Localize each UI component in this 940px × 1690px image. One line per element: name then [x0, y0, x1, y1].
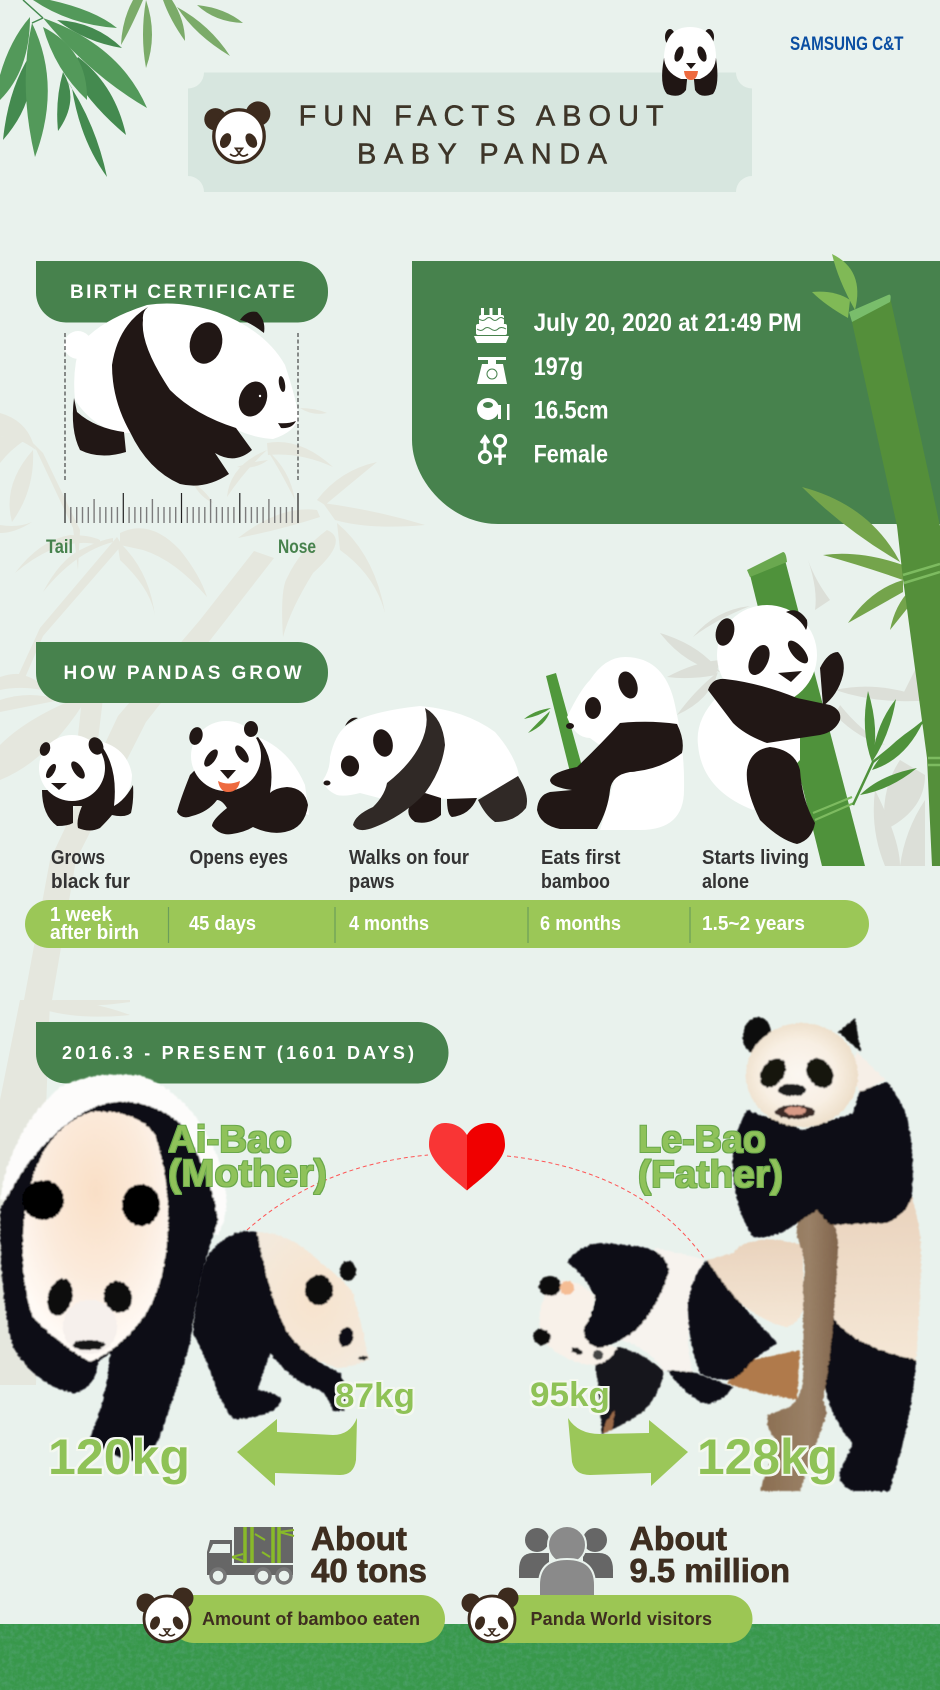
timeline bar: 1 week: [50, 904, 113, 926]
weight labels: [48, 1376, 838, 1485]
birth panda with ruler: [64, 304, 299, 523]
weight labels: 128kg: [697, 1429, 838, 1485]
icon: tape measure: [477, 398, 510, 420]
icon: heart: [429, 1123, 505, 1190]
ruler labels: Tail: [46, 537, 73, 558]
growth stage labels: alone: [702, 871, 749, 893]
stat: visitors: [630, 1520, 790, 1589]
ghost bamboo background: [0, 408, 425, 1385]
stat: bamboo eaten: 40 tons: [311, 1552, 427, 1589]
back leg: [73, 398, 126, 456]
timeline bar: 45 days: [189, 913, 256, 935]
photo: father panda Le-Bao climbing: [688, 1015, 921, 1491]
weight labels: 120kg: [48, 1429, 190, 1485]
icon: panda face in title: [204, 101, 270, 162]
ghost leaves behind right pandas: [660, 560, 930, 866]
title: FUN FACTS ABOUT: [299, 100, 664, 132]
birth facts: July 20, 2020 at 21:49 PM: [534, 309, 802, 337]
parent name labels: (Father): [638, 1154, 783, 1196]
birth facts: [534, 309, 802, 468]
growth stage labels: bamboo: [541, 871, 610, 893]
logo: SAMSUNG C&T: [790, 34, 904, 55]
arrow: mother weight: [237, 1418, 357, 1486]
timeline bar: 1.5~2 years: [702, 913, 805, 935]
photo: mother panda Ai-Bao side: [193, 1231, 370, 1419]
growth stage labels: Grows: [51, 847, 105, 869]
icon: panda face on bamboo pill: [136, 1588, 194, 1642]
icon: panda face on visitors pill: [462, 1588, 518, 1642]
growth stage labels: Opens eyes: [190, 847, 288, 869]
timeline bar: 4 months: [349, 913, 429, 935]
panda stage 2: [177, 721, 309, 834]
photo: father panda second body: [530, 1243, 733, 1434]
tail: [64, 331, 92, 359]
parent name labels: (Mother): [168, 1153, 327, 1195]
heading: 2016.3 to present: 2016.3 - PRESENT (1601 DAYS): [62, 1043, 414, 1063]
grass: [0, 1624, 940, 1690]
pill: bamboo eaten: [170, 1595, 445, 1643]
growth stage labels: Eats first: [541, 847, 621, 869]
growth stage labels: paws: [349, 871, 394, 893]
top-left bamboo leaves: [0, 0, 243, 177]
pill: bamboo eaten: Amount of bamboo eaten: [202, 1609, 420, 1629]
second bamboo stalk with branch: [747, 552, 923, 866]
icon: standing panda on banner: [662, 27, 717, 96]
right bamboo: middle leaves: [802, 487, 910, 630]
pill: visitors: [480, 1595, 752, 1643]
growth stage labels: black fur: [51, 871, 130, 893]
photo: mother panda Ai-Bao front: [0, 1074, 226, 1462]
title: [299, 100, 664, 170]
panda stage 3: [323, 706, 527, 830]
arrow: father weight: [568, 1418, 688, 1486]
heading: how pandas grow: [36, 642, 328, 703]
stat: visitors: About: [630, 1520, 727, 1557]
growth stage labels: Walks on four: [349, 847, 469, 869]
title: BABY PANDA: [357, 138, 608, 170]
ruler labels: [46, 537, 316, 558]
stat: visitors: 9.5 million: [630, 1552, 790, 1589]
weight labels: 95kg: [530, 1376, 610, 1414]
stat: bamboo eaten: [311, 1520, 427, 1589]
timeline bar: 6 months: [540, 913, 621, 935]
icon: truck with bamboo: [207, 1527, 294, 1583]
ruler labels: Nose: [278, 537, 316, 558]
timeline bar: [25, 900, 869, 948]
birth facts: 16.5cm: [534, 396, 609, 424]
icon: gender symbols: [480, 436, 506, 465]
timeline bar: after birth: [50, 922, 139, 944]
stat: bamboo eaten: About: [311, 1520, 407, 1557]
parent name labels: Le-Bao: [638, 1119, 766, 1161]
panel: birth details: [412, 261, 940, 524]
pill: visitors: Panda World visitors: [530, 1609, 712, 1629]
birth facts: 197g: [534, 353, 583, 381]
parent name labels: [168, 1119, 783, 1196]
dotted arcs to heart: [247, 1155, 704, 1258]
icon: cake: [474, 308, 509, 343]
weight labels: 87kg: [335, 1377, 415, 1415]
heading: birth certificate: BIRTH CERTIFICATE: [70, 282, 295, 303]
heading: how pandas grow: HOW PANDAS GROW: [64, 663, 302, 684]
heading: 2016.3 to present: [36, 1022, 449, 1084]
birth facts: Female: [534, 440, 608, 468]
heading: birth certificate: [36, 261, 328, 322]
ruler: [71, 499, 292, 523]
title banner: [188, 72, 752, 192]
panda stage 5 climbing bamboo: [698, 605, 844, 844]
body: [74, 304, 299, 439]
growth stage labels: Starts living: [702, 847, 809, 869]
black band: [112, 307, 252, 486]
icon: scale: [477, 357, 507, 384]
parent name labels: Ai-Bao: [168, 1119, 292, 1161]
growth stage labels: [51, 847, 809, 893]
panda stage 4 with bamboo: [524, 657, 684, 830]
right bamboo: main stalk: [849, 295, 940, 866]
right bamboo: top leaves: [812, 254, 857, 318]
icon: people: [519, 1526, 613, 1597]
panda stage 1: [38, 735, 133, 830]
